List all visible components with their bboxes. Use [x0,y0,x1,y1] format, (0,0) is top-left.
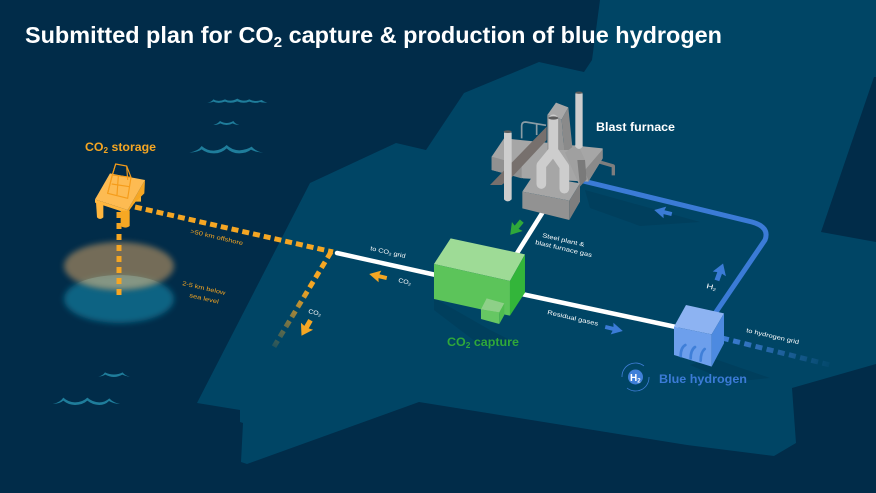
arrow: H2 up [710,261,730,283]
pipeline: branch [272,252,331,350]
label: CO2 capture: CO [447,335,465,349]
small labels [308,233,800,346]
arrow: blue return [653,204,673,220]
small labels: grid [391,251,406,260]
label: CO2 storage: storage [108,140,156,154]
label: offshore: >50 km offshore [190,229,244,247]
label: CO2 capture: capture [470,335,519,349]
label: CO2 storage: 2 [103,146,109,155]
label: depth [182,281,227,306]
icon: H2 [622,363,649,391]
label: depth: sea level [189,293,219,306]
arrow: CO2 branch [295,317,317,339]
waves: upper [189,99,267,153]
CO2 capture building [434,238,525,324]
land [197,0,876,464]
reservoirs [64,242,174,323]
small labels: H [706,283,712,291]
small labels: Steel plant & [542,233,585,249]
title: Submitted plan for CO [25,22,269,48]
platform [95,164,145,228]
title: 2 [274,34,282,51]
small labels: to hydrogen grid [746,328,800,346]
small labels: 2 [408,281,412,287]
label: CO2 capture: 2 [466,341,471,350]
small labels: 2 [712,287,717,292]
icon: H2: H [630,373,637,384]
label: CO2 storage: CO [85,140,103,154]
small labels: Residual gases [547,310,599,328]
small labels: 2 [318,312,322,318]
small labels: CO [398,278,408,286]
pipeline: hydrogen grid [722,338,830,365]
small labels: to CO [370,246,386,255]
title: capture & production of blue hydrogen [282,22,722,48]
waves: lower [53,372,130,405]
small labels: CO [308,309,318,317]
small labels: 2 [388,251,393,257]
small labels: blast furnace gas [535,240,592,259]
label: Blue hydrogen: Blue hydrogen [659,372,747,386]
pipes: white [337,207,676,327]
icon: H2: 2 [637,378,641,384]
pipeline: offshore [135,207,333,252]
shadows [434,190,770,382]
arrow: CO2 grid [368,268,388,284]
hydrogen unit [674,305,724,367]
blast furnace [490,91,613,220]
label: depth: 2-5 km below [182,281,227,297]
pipeline: storage vertical [116,212,122,296]
pipe: blue H2 [583,181,766,312]
label: Blast furnace: Blast furnace [596,120,675,134]
arrow: green [505,217,527,239]
arrow: residual [604,321,624,337]
